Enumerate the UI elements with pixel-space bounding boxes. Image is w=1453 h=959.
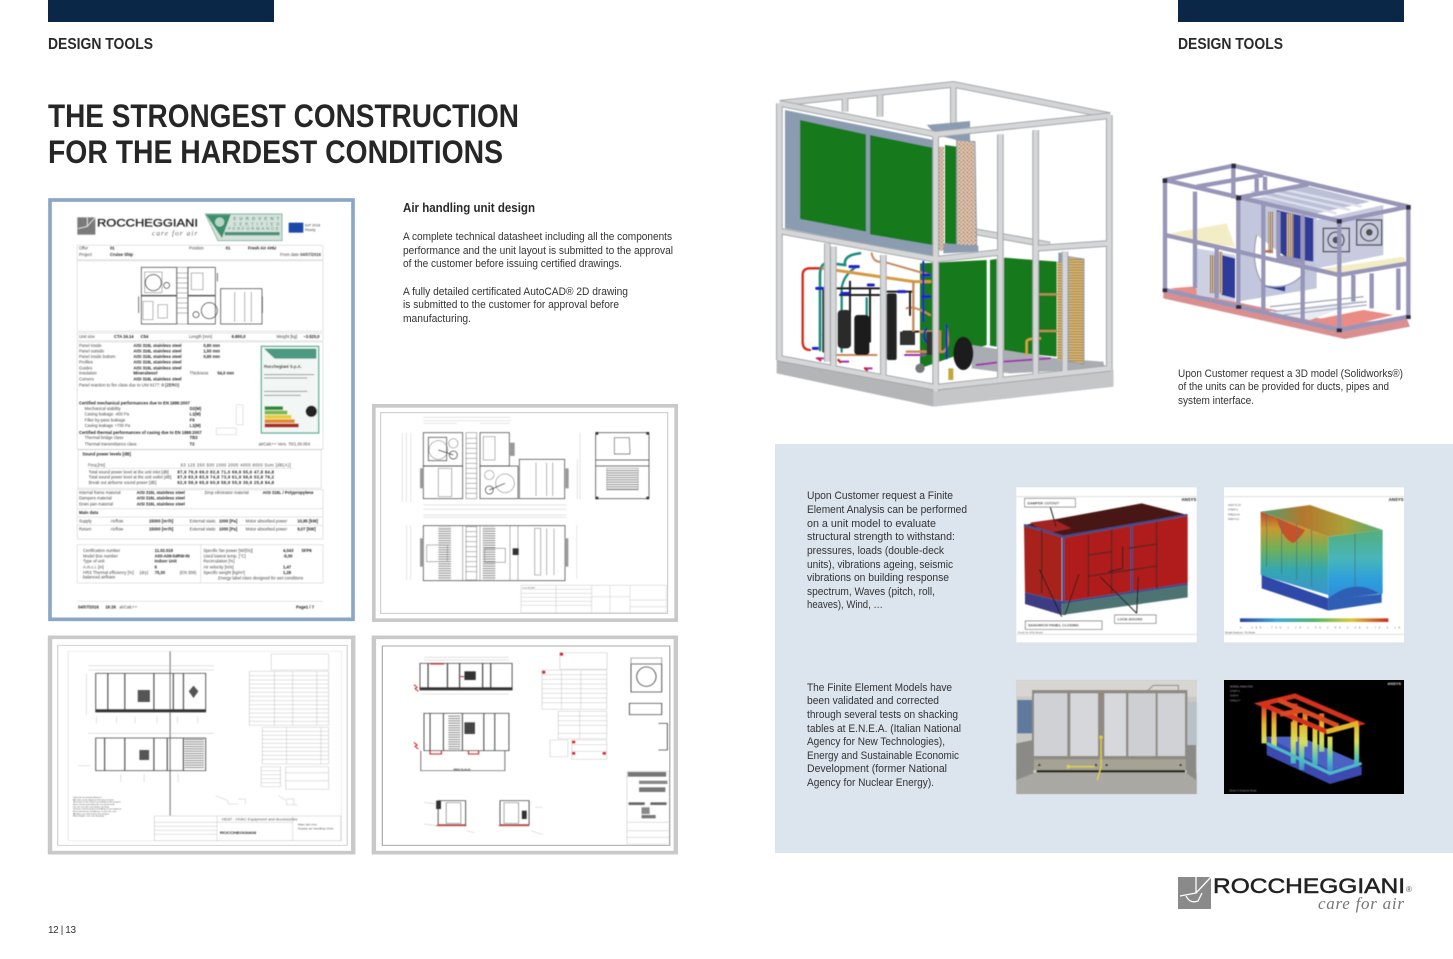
materials list: 1,50 mm [203, 348, 220, 353]
notes: Structure to be fixed according to the project [73, 801, 121, 804]
section label: left page: DESIGN TOOLS [48, 36, 153, 53]
materials list: 0,80 mm [203, 354, 220, 359]
image: mesh model with annotations: SANDWICH PANEL CLOSING [1028, 624, 1079, 628]
image: deformation contour: STEP=1 [1228, 508, 1238, 512]
notes: Environmental conditions as per the unit [73, 810, 117, 813]
certification box: HRS Thermal efficiency [%] [83, 570, 134, 575]
text block: air handling unit design [403, 200, 673, 325]
certification box: Indoor Unit [155, 559, 177, 564]
unit size row: CTA 24.14 [114, 334, 134, 339]
image: deformation contour [1224, 487, 1404, 642]
offer box: 01 [110, 246, 115, 251]
header bar: right page [1178, 0, 1404, 22]
certification box: Model Box number [83, 553, 118, 558]
offer box: 01 [226, 246, 231, 251]
materials list: Insulation [79, 371, 97, 376]
logo: Rocchegiani [1178, 875, 1412, 913]
unit size row: Length [mm] [189, 334, 212, 339]
internal materials and main data: 1000 [Pa] [219, 518, 238, 523]
Eurovent badge: EUROVENT [233, 216, 280, 221]
sound power levels table: Sound power levels [dB] [82, 451, 131, 456]
bottom sections [424, 801, 543, 835]
text block: air handling unit design: of the customer before issuing certified drawings. [403, 258, 622, 270]
materials list: Mechanical stability [85, 406, 122, 411]
violet frame [1165, 166, 1408, 330]
image: deformation contour: FREQ=14 [1228, 512, 1240, 516]
notes [73, 796, 122, 818]
FEA images group [1016, 487, 1404, 794]
certification box: (dry) [140, 570, 149, 575]
text: finite element analysis [807, 490, 967, 611]
unit size row: ~3.520,0 [303, 334, 320, 339]
materials list: Casing leakage +700 Pa [85, 423, 131, 428]
internal materials and main data: Airflow [111, 527, 124, 532]
certification box: Used lowest temp. [°C] [203, 553, 246, 558]
materials list: Mineralwool [133, 371, 157, 376]
materials list: airCalc++ Vers. 70/1.00.004 [259, 441, 311, 446]
notes: Max height: see unit drawing [73, 815, 105, 818]
materials list: Panel inside [79, 343, 102, 348]
text block: air handling unit design: is submitted to the customer for approval before [403, 299, 619, 311]
logo: Rocchegiani: care for air [1318, 894, 1404, 913]
ErP note: ErP 2018 [305, 224, 320, 228]
image: modal analysis of frame: Model 3 Analysis Mode [1229, 788, 1257, 792]
certification box: Specific fan power [W/(l/s)] [203, 548, 253, 553]
certification box: Air velocity [m/s] [203, 564, 234, 569]
text: validated models: Energy and Sustainable Economic [807, 750, 959, 762]
internal materials and main data: 10,85 [kW] [297, 518, 319, 523]
materials list: AISI 316L stainless steel [133, 376, 182, 381]
certification box: (EN 308) [180, 570, 197, 575]
sound power levels table: Total sound power level at the unit inlet [dB] [89, 469, 169, 474]
frame corners [1163, 164, 1411, 332]
internal materials and main data: Dampers material [79, 496, 112, 501]
unit size row: Unit size [79, 334, 96, 339]
notes: Do not use the unit before testing [73, 806, 110, 808]
unit size row: Weight [kg] [276, 334, 297, 339]
image: mesh model with annotations [1016, 487, 1197, 642]
title sheet [627, 771, 669, 844]
internal materials and main data: Supply [79, 518, 93, 523]
caption: 3D model: of the units can be provided for ducts, pipes and [1178, 381, 1389, 393]
base plinth [777, 355, 1113, 407]
title: THE STRONGEST CONSTRUCTION [48, 98, 519, 134]
image: modal analysis of frame: MODAL ANALYSIS [1230, 684, 1253, 688]
materials list: D2(M) [190, 406, 202, 411]
Eurovent badge: PERFORMANCE [228, 226, 279, 231]
internal materials and main data: Drain pan material [79, 501, 113, 506]
plan: 6800 (5+8+2) [454, 768, 471, 771]
materials list: AISI 316L stainless steel [133, 360, 182, 365]
internal panels [1170, 187, 1407, 320]
image: modal analysis of frame: ANSYS [1387, 681, 1401, 686]
materials list: AISI 316L stainless steel [133, 348, 182, 353]
panel: finite element analysis [775, 444, 1453, 853]
materials list: AISI 316L stainless steel [133, 354, 182, 359]
materials list: 0,80 mm [203, 343, 220, 348]
certification box: Recirculation [%] [203, 559, 235, 564]
image: modal analysis of frame: FREQ=7 [1230, 698, 1241, 702]
materials list: Panel outside [79, 348, 105, 353]
certification box: Certification number [83, 548, 121, 553]
internal materials and main data [77, 490, 323, 539]
internal materials and main data: AISI 316L stainless steel [137, 490, 185, 495]
certification box: 1,28 [283, 570, 292, 575]
internal materials and main data: Motor absorbed power [246, 518, 288, 523]
materials list: F9 [190, 417, 195, 422]
datasheet logo: care for air [152, 228, 197, 237]
materials list: Thermal bridge class [85, 435, 123, 440]
text block: air handling unit design: A fully detailed certificated AutoCAD® 2D drawing [403, 286, 628, 298]
certification box: Specific weight [kg/m³] [203, 570, 245, 575]
text block: air handling unit design: A complete technical datasheet including all the components [403, 231, 672, 243]
datasheet footer: airCalc++ [119, 604, 138, 609]
notes: Grease and transport handling in accordance [73, 808, 122, 811]
internal materials and main data: External static [190, 518, 216, 523]
materials list: Certified thermal performances of casing due to EN 1886:2007 [79, 430, 202, 435]
datasheet logo [77, 217, 198, 237]
notes: General recommendations [73, 796, 103, 799]
end elevation [596, 432, 649, 499]
rear frame [780, 84, 1110, 245]
materials list [77, 342, 323, 449]
certification box: balanced airflows [83, 574, 115, 579]
illustration: 3D unit model with coils and piping [777, 84, 1113, 407]
image: deformation contour: DMX=3.2 [1228, 517, 1240, 521]
sound power levels table: 62,9 58,9 65,9 60,8 58,9 55,9 39,6 25,8 84,8 [177, 480, 275, 485]
text: finite element analysis: units), vibrations ageing, seismic [807, 559, 953, 571]
text: finite element analysis: structural strength to withstand: [807, 531, 955, 543]
offer box: Cruise Ship [110, 252, 134, 257]
internal materials and main data: Motor absorbed power [246, 527, 288, 532]
offer box: Fresh Air AHU [248, 246, 276, 251]
lower coils [1057, 253, 1084, 364]
dimension lines [402, 417, 580, 580]
text: validated models: The Finite Element Models have [807, 682, 952, 694]
datasheet footer: Page1 / 7 [296, 604, 315, 609]
text: validated models: Agency for New Technologies), [807, 736, 945, 748]
offer box: Project [79, 252, 93, 257]
materials list: Panel reaction to fire class due to UNI 9177: 0 (ZERO) [79, 382, 180, 387]
section label: right page: DESIGN TOOLS [1178, 36, 1283, 53]
materials list: L1(M) [190, 412, 201, 417]
text: finite element analysis: spectrum, Waves (pitch, roll, [807, 586, 935, 598]
text block: air handling unit design: Air handling unit design [403, 200, 535, 215]
piping and compressors [803, 253, 1057, 370]
materials list: 54,0 mm [217, 371, 234, 376]
title: FOR THE HARDEST CONDITIONS [48, 134, 503, 170]
certification box: 4,043 [283, 548, 294, 553]
text: validated models: Development (former National [807, 763, 947, 775]
connection details [216, 796, 298, 805]
certification box: A00-A08-54RW-IN [155, 553, 190, 558]
notes: Base frame painted and rust protected [73, 803, 115, 806]
image: mesh model with annotations: Fresh Air AHU Model [1018, 630, 1043, 634]
datasheet footer: 04/07/2016 [78, 604, 99, 609]
image: deformation contour: 0 .398 .796 1.19 1.59 1.99 2.38 2.78 3.18 [1240, 626, 1401, 630]
image: mesh model with annotations: ANSYS [1181, 497, 1196, 502]
materials list: Casing leakage -400 Pa [85, 412, 130, 417]
energy label [261, 346, 319, 433]
side elevation [420, 433, 569, 499]
EU flag [289, 223, 303, 233]
panel: certified technical datasheet [50, 200, 353, 619]
certification box [77, 545, 323, 583]
fans [1323, 220, 1382, 252]
materials list: AISI 316L stainless steel [133, 365, 182, 370]
internal materials and main data: Drop eliminator material [205, 490, 249, 495]
materials list: Guides [79, 365, 92, 370]
text: validated models: Agency for Nuclear Energy). [807, 777, 934, 789]
panel: certified technical datasheet: Ready [305, 228, 316, 232]
certification box: -5,00 [283, 553, 293, 558]
certification box: 75,30 [155, 570, 166, 575]
materials list: AISI 316L stainless steel [133, 343, 182, 348]
upper panels [785, 110, 970, 257]
caption: 3D model: system interface. [1178, 395, 1254, 407]
pink base [1163, 287, 1410, 339]
internal materials and main data: AISI 316L stainless steel [137, 501, 185, 506]
sound power levels table: Break out airborne sound power [dB] [89, 480, 156, 485]
title block [521, 585, 666, 613]
drawing title block: ROCCHEGGIANI [220, 830, 256, 835]
text: finite element analysis: heaves), Wind, … [807, 599, 883, 611]
text: finite element analysis: Upon Customer request a Finite [807, 490, 953, 502]
drawing title block: Supply air handling Units [298, 827, 334, 831]
internal materials and main data: AISI 316L stainless steel [137, 496, 185, 501]
top elevation [414, 657, 512, 694]
datasheet footer: 16:26 [105, 604, 117, 609]
image: mesh model with annotations: DAMPER CUTOUT [1027, 501, 1060, 505]
title block: Fresh Air AHU [523, 587, 536, 590]
plan view [420, 526, 568, 581]
header bar: left page [48, 0, 274, 22]
sound power levels table [78, 450, 321, 488]
sound power levels table: 87,9 79,9 69,0 82,6 71,0 69,9 55,6 47,8 84,8 [177, 469, 275, 474]
assembly top view [86, 666, 214, 723]
sound power levels table: Freq.[Hz] [88, 463, 105, 468]
image: modal analysis of frame: SUB=5 [1230, 694, 1239, 698]
drawing title block: Main lab Unit [298, 823, 317, 827]
offer box: Position [189, 246, 204, 251]
text: finite element analysis: on a unit model to evaluate [807, 518, 936, 530]
parts tables [249, 654, 329, 789]
certification box: Type of unit [83, 559, 105, 564]
certification box: A.m.c.i. [m] [83, 564, 104, 569]
text: validated models [807, 682, 961, 789]
Eurovent badge [205, 214, 282, 241]
certification box: 1,47 [283, 564, 292, 569]
title [48, 98, 519, 170]
text: finite element analysis: vibrations on building response [807, 572, 949, 584]
text: finite element analysis: Element Analysis can be performed [807, 504, 967, 516]
materials list: Certified mechanical performances due to EN 1886:2007 [79, 400, 191, 405]
internal materials and main data: 1000 [Pa] [219, 527, 238, 532]
lower panels [920, 258, 1105, 373]
materials list: Filter by-pass leakage [85, 417, 126, 422]
caption: 3D model: Upon Customer request a 3D model (Solidworks®) [1178, 368, 1403, 380]
certification box: Energy label class designed for wet conditions [218, 576, 303, 581]
page number: 12 | 13 [48, 925, 76, 936]
datasheet logo: ROCCHEGGIANI [97, 217, 198, 229]
offer box: Offer [79, 246, 89, 251]
sound power levels table: 63 125 250 500 1000 2000 4000 8000 Sum [dB(A)] [181, 463, 291, 468]
internal materials and main data: 15000 [m³/h] [149, 527, 174, 532]
certification box: 11.02.018 [155, 548, 174, 553]
materials list: L1(M) [190, 423, 201, 428]
unit size row: C54 [141, 334, 149, 339]
sound power levels table: Total sound power level at the unit outlet [dB] [89, 474, 171, 479]
text: validated models: been validated and corrected [807, 695, 939, 707]
image: modal analysis of frame [1224, 680, 1404, 794]
internal materials and main data: Return [79, 527, 92, 532]
assembly side view [78, 733, 214, 782]
internal materials and main data: 9,07 [kW] [297, 527, 316, 532]
text: validated models: tables at E.N.E.A. (Italian National [807, 723, 961, 735]
panel: AHU assembly drawing [50, 637, 353, 853]
materials list: Thermal transmittance class [85, 441, 137, 446]
caption: 3D model [1178, 368, 1403, 407]
materials list: Thickness [190, 371, 208, 376]
drawing title block: HEAT - HVAC Equipment and Accessories [222, 818, 298, 822]
materials list: TB3 [190, 435, 198, 440]
unit size row: 6.800,0 [232, 334, 246, 339]
image: deformation contour: ANSYS [1389, 497, 1404, 502]
panel: detailed unit drawing [374, 637, 676, 853]
materials list: Corners [79, 376, 94, 381]
datasheet footer [77, 601, 323, 609]
internal materials and main data: Airflow [111, 518, 124, 523]
text: finite element analysis: pressures, loads (double-deck [807, 545, 944, 557]
materials list: Profiles [79, 360, 93, 365]
internal materials and main data: Internal frame material [79, 490, 121, 495]
panel: layout drawing [374, 406, 676, 620]
internal materials and main data: External static [190, 527, 216, 532]
unit schematic [77, 261, 323, 331]
notes: All units to be fitted on the base frame [73, 799, 115, 801]
text: validated models: through several tests on shacking [807, 709, 958, 721]
Eurovent badge: CERTIFIED [233, 221, 279, 226]
materials list: Panel inside bottom [79, 354, 116, 359]
logo: Rocchegiani: ® [1406, 885, 1412, 894]
image: mesh model with annotations: LOCK-DOORS [1117, 618, 1143, 622]
plan [414, 713, 509, 771]
illustration: 3D model of unit for ducts and pipes [1163, 164, 1411, 339]
offer box: From date 04/07/2016 [280, 252, 322, 257]
certification box: SFP6 [301, 548, 312, 553]
notes: All data are referred to the project [73, 813, 110, 815]
image: deformation contour: Modal Analysis, 7th Mode [1225, 630, 1256, 634]
drawing title block [154, 816, 341, 841]
front frame [779, 103, 1110, 392]
internal materials and main data: AISI 316L / Polypropylene [263, 490, 314, 495]
internal materials and main data: 15000 [m³/h] [149, 518, 174, 523]
section elevations [629, 658, 667, 750]
offer box [77, 245, 323, 260]
schedules [542, 653, 607, 759]
unit size row [77, 333, 323, 341]
image: modal analysis of frame: STEP=1 [1230, 689, 1240, 693]
sound power levels table: 87,9 83,9 83,9 74,8 73,9 61,9 58,6 53,8 79,2 [177, 474, 275, 479]
text block: air handling unit design: performance and the unit layout is submitted to the approval [403, 245, 673, 257]
certification box: 6 [155, 564, 158, 569]
materials list: T2 [190, 441, 195, 446]
logo: Rocchegiani: ROCCHEGGIANI [1213, 875, 1405, 898]
energy label: Rocchegiani S.p.A. [264, 364, 302, 369]
image: deformation contour: ANSYS 13 [1228, 503, 1241, 507]
image: shaking table photo [1016, 680, 1197, 794]
compressors [838, 293, 973, 380]
upper coils [938, 140, 978, 253]
text block: air handling unit design: manufacturing. [403, 313, 471, 325]
internal materials and main data: Main data [79, 510, 99, 515]
